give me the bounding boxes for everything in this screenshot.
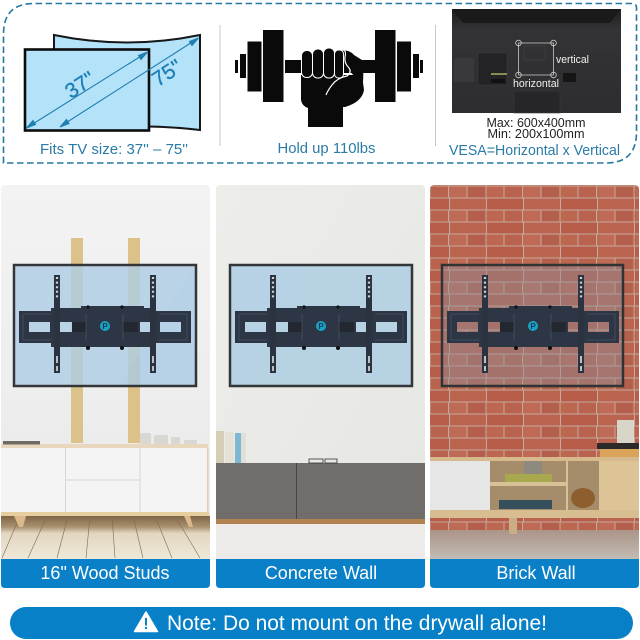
TV back photo <box>452 9 621 113</box>
panel: VESA pattern <box>449 9 621 159</box>
dashed feature frame <box>4 4 636 163</box>
icon: warning triangle <box>134 612 158 632</box>
panel: weight capacity <box>235 30 423 157</box>
wall mount <box>447 275 619 373</box>
wall mount <box>19 275 191 373</box>
note banner <box>10 607 633 639</box>
label bar: brick <box>430 559 639 588</box>
note text: Note: Do not mount on the drywall alone! <box>167 612 547 635</box>
label bar: concrete <box>216 559 425 588</box>
spec: max: Max: 600x400mm <box>486 116 586 130</box>
panel: wood studs <box>1 185 210 588</box>
label: concrete: Concrete Wall <box>265 563 377 583</box>
label: vertical: vertical <box>556 54 589 66</box>
diagonal size arrows <box>26 38 198 128</box>
wall mount <box>235 275 407 373</box>
caption: VESA: VESA=Horizontal x Vertical <box>449 142 620 159</box>
TV outline <box>442 265 623 386</box>
label bar: wood studs <box>1 559 210 588</box>
icon: small flat TV <box>25 50 149 130</box>
label: horizontal: horizontal <box>513 78 559 90</box>
wood studs <box>71 238 140 443</box>
panel: brick wall <box>430 185 639 588</box>
label: brick: Brick Wall <box>496 563 576 583</box>
TV outline <box>14 265 196 386</box>
label: 37 inch: 37" <box>61 67 99 103</box>
divider left <box>220 25 221 146</box>
media console <box>430 420 639 559</box>
sideboard <box>216 431 425 559</box>
panel: concrete wall <box>216 185 425 588</box>
divider right <box>435 25 436 146</box>
caption: TV size: Fits TV size: 37'' – 75'' <box>40 141 188 158</box>
icon: large curved TV <box>54 35 200 130</box>
cabinet <box>1 433 210 559</box>
label: 75 inch: 75" <box>148 55 186 91</box>
label: wood studs: 16" Wood Studs <box>40 563 170 583</box>
TV outline <box>230 265 412 386</box>
caption: weight: Hold up 110lbs <box>278 140 376 157</box>
panel: TV size <box>25 35 200 158</box>
icon: dumbbell and fist <box>235 30 423 127</box>
spec: min: Min: 200x100mm <box>488 127 584 141</box>
